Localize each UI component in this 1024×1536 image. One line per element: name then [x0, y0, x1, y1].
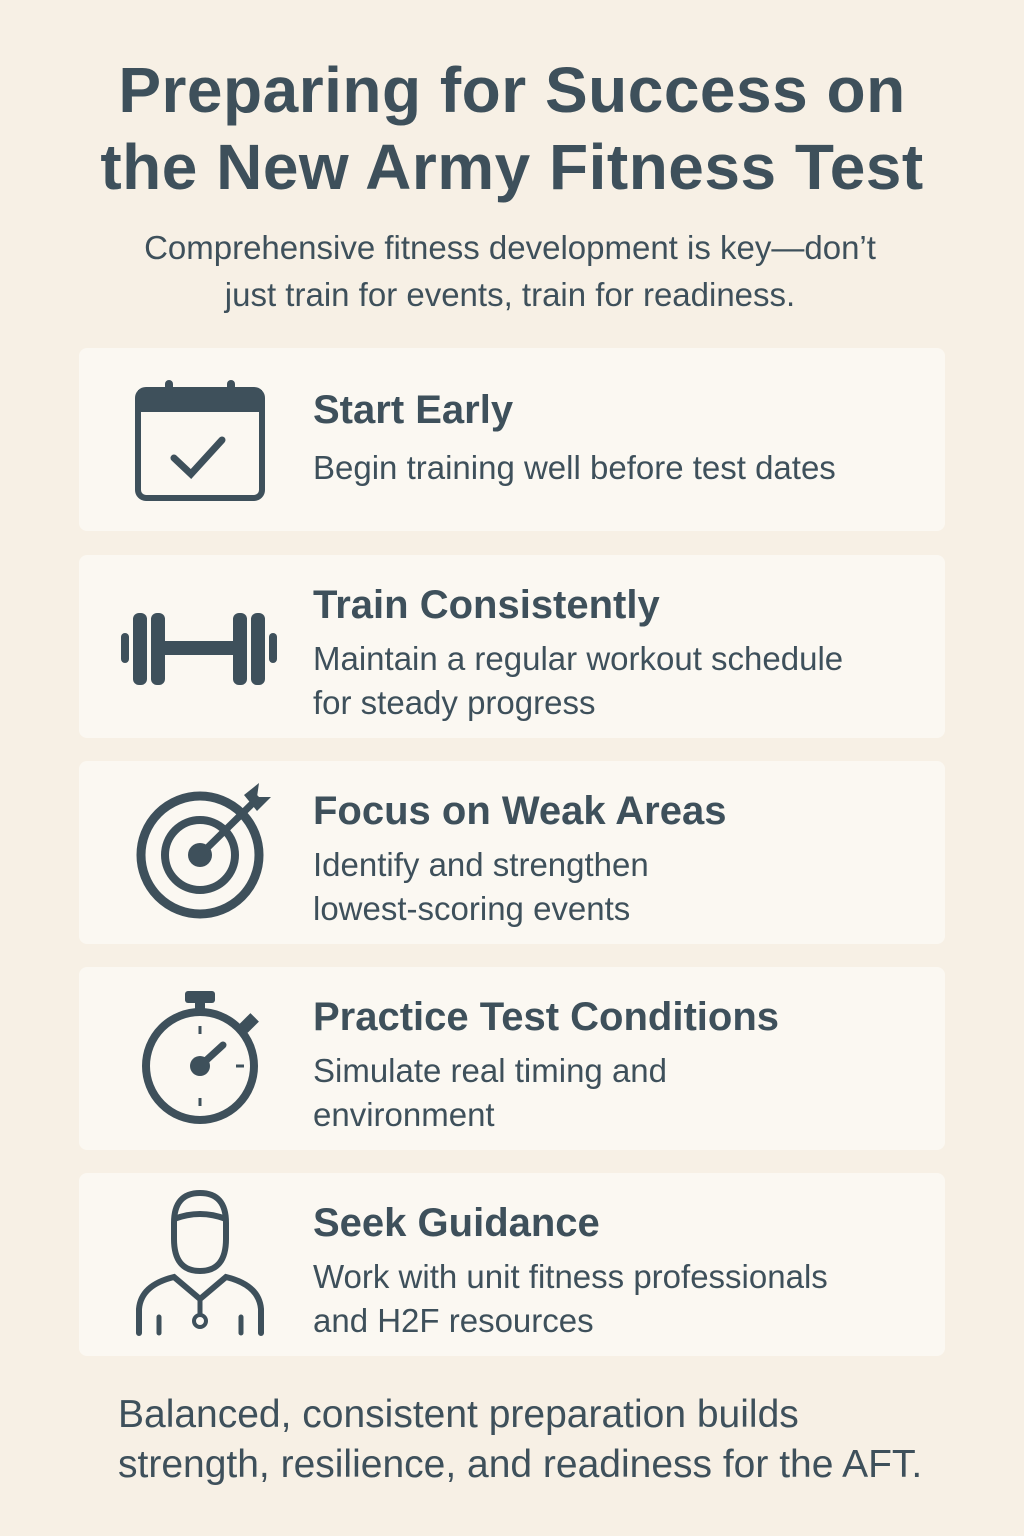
- heading: Seek Guidance: [313, 1201, 600, 1245]
- subtitle: just train for events, train for readiness.: [225, 276, 795, 313]
- card: guidance: [79, 1173, 945, 1356]
- card: practice: [79, 967, 945, 1150]
- heading: Practice Test Conditions: [313, 995, 779, 1039]
- icon: stopwatch: [142, 991, 259, 1124]
- footer text: strength, resilience, and readiness for the AFT.: [118, 1443, 922, 1486]
- card: start early: [79, 348, 945, 531]
- title: the New Army Fitness Test: [100, 131, 924, 203]
- footer text: [118, 1393, 922, 1486]
- card: weak areas: [79, 761, 945, 944]
- body: Identify and strengthen: [313, 846, 649, 883]
- body: Work with unit fitness professionals: [313, 1258, 828, 1295]
- icon: dumbbell: [121, 613, 277, 685]
- body: environment: [313, 1096, 495, 1133]
- heading: Focus on Weak Areas: [313, 789, 726, 833]
- title: Preparing for Success on: [118, 54, 906, 126]
- footer text: Balanced, consistent preparation builds: [118, 1393, 799, 1436]
- subtitle: [144, 229, 876, 313]
- icon: person: [136, 1190, 264, 1336]
- subtitle: Comprehensive fitness development is key—don’t: [144, 229, 876, 266]
- icon: calendar: [135, 380, 265, 501]
- heading: Start Early: [313, 388, 513, 432]
- body: Maintain a regular workout schedule: [313, 640, 843, 677]
- body: [313, 640, 843, 721]
- body: [313, 846, 649, 927]
- card: train consistently: [79, 555, 945, 738]
- body: Simulate real timing and: [313, 1052, 667, 1089]
- body: Begin training well before test dates: [313, 449, 836, 486]
- title: [100, 54, 924, 203]
- body: and H2F resources: [313, 1302, 594, 1339]
- body: for steady progress: [313, 684, 595, 721]
- body: [313, 1258, 828, 1339]
- body: lowest-scoring events: [313, 890, 630, 927]
- body: [313, 1052, 667, 1133]
- icon: target: [136, 783, 271, 918]
- heading: Train Consistently: [313, 583, 660, 627]
